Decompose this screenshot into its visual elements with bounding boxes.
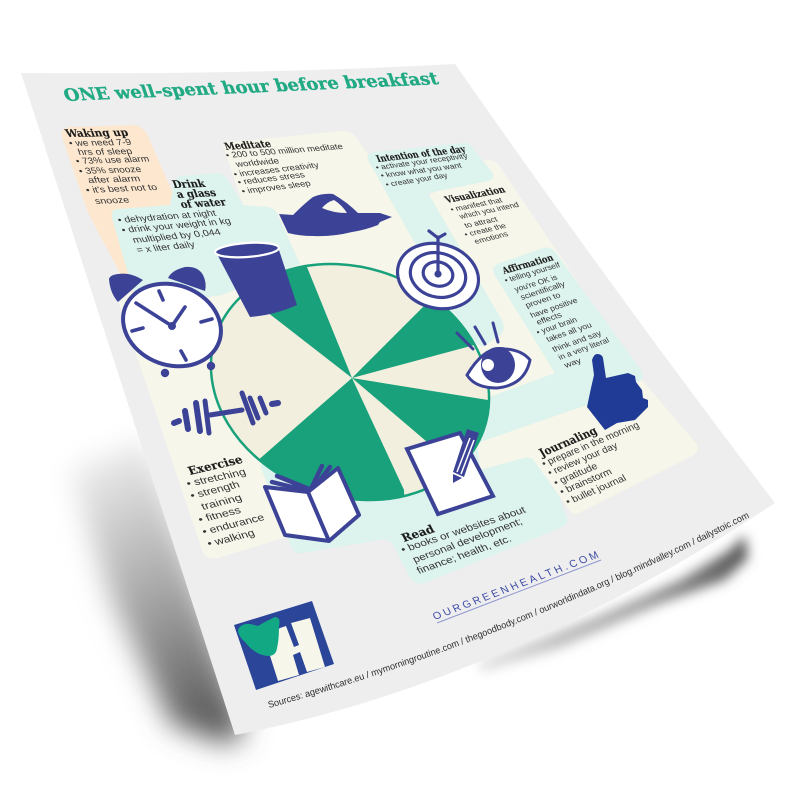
text block: exercise: • fitness [197, 505, 243, 526]
text block: meditate: worldwide [233, 156, 281, 169]
icon: eye [457, 323, 530, 388]
text block: waking up: Waking up [63, 126, 130, 140]
text block: exercise: training [200, 493, 244, 513]
icon: target [390, 231, 486, 318]
text block: journaling: • gratitude [552, 461, 600, 489]
wedge: top [270, 267, 352, 378]
icon: notebook and pencil [407, 429, 493, 514]
text block: exercise: • endurance [201, 512, 267, 538]
text block: waking up: • 35% snooze [77, 164, 143, 176]
text block: meditate: • 200 to 500 million meditate [224, 141, 345, 160]
text block: waking up: hrs of sleep [76, 146, 134, 157]
text block: waking up: • it's best not to [84, 182, 159, 195]
text block: drink a glass of water [116, 177, 232, 255]
text block: affirmation: scientifically [519, 280, 567, 302]
text block: drink a glass of water: • dehydration at night [116, 208, 218, 225]
wedge: bottom [260, 378, 404, 499]
text block: drink a glass of water: • drink your weight in kg [120, 216, 232, 235]
panel: visualization [427, 160, 610, 400]
panel: drink a glass of water [112, 173, 300, 308]
text block: affirmation: takes all you [545, 321, 593, 344]
text block: intention of the day: • know what you want [379, 161, 464, 180]
bottom page shadow [480, 535, 748, 672]
panel: affirmation and read band [260, 248, 643, 584]
text block: affirmation: you're OK is [513, 273, 559, 294]
text block: affirmation [500, 253, 611, 370]
text block: affirmation: effects [535, 310, 564, 327]
text block: intention of the day: Intention of the day [375, 144, 468, 165]
text block: journaling: Journaling [535, 424, 600, 460]
panel: main cream background [110, 131, 495, 559]
text block: journaling: • prepare in the morning [540, 420, 642, 470]
panel: journaling [477, 380, 698, 514]
text block: drink a glass of water: of water [178, 196, 228, 211]
text block: affirmation: • telling yourself [503, 260, 562, 285]
text block: exercise: Exercise [185, 452, 245, 478]
wheel chart [210, 262, 490, 502]
text block: affirmation: way [561, 356, 583, 370]
text block: visualization: emotions [472, 230, 510, 246]
text block: affirmation: think and say [551, 329, 603, 354]
text block: intention of the day [374, 144, 469, 189]
text block: intention of the day: • activate your receptivity [374, 152, 469, 172]
text block: read: finance; health, etc. [415, 534, 514, 577]
text block: visualization: Visualization [442, 185, 507, 206]
text block: waking up: snooze [93, 195, 131, 206]
left page shadow [70, 440, 245, 745]
website link: OURGREENHEALTH.COM [431, 549, 601, 623]
text block: waking up: • 73% use alarm [74, 154, 151, 166]
text block: affirmation: proven to [524, 290, 563, 310]
text block: exercise [185, 452, 267, 550]
text block: journaling: • review your day [546, 441, 620, 479]
text block: journaling: • bullet journal [564, 473, 628, 508]
text block: exercise: • stretching [185, 467, 248, 490]
text block: affirmation: in a very literal [556, 336, 611, 362]
text block: affirmation: Affirmation [500, 253, 555, 277]
text block: meditate: Meditate [223, 138, 273, 153]
text block: visualization: to attract [462, 215, 500, 230]
icon: meditating hand [279, 194, 392, 236]
logo [234, 601, 334, 690]
text block: meditate: • increases creativity [232, 160, 321, 179]
icon: dumbbell [174, 393, 278, 433]
text block: affirmation: • your brain [535, 315, 579, 337]
icon: alarm clock [109, 267, 233, 380]
text: Sources: agewithcare.eu / mymorningroutine.com / thegoodbody.com / ourworldindata.org / blog.mindvalley.com / dailystoic.com [268, 513, 750, 708]
text block: waking up [63, 126, 159, 206]
text block: drink a glass of water: a glass [174, 186, 218, 201]
text block: intention of the day: • create your day [384, 171, 449, 189]
wedge: lower right [352, 378, 488, 447]
panel: intention of the day [368, 143, 504, 347]
text block: waking up: • we need 7-9 [67, 137, 133, 148]
text block: drink a glass of water: Drink [170, 177, 208, 191]
icon: open book [265, 466, 359, 541]
text block: meditate: • improves sleep [240, 178, 313, 196]
text block: affirmation: have positive [529, 296, 580, 320]
text block: drink a glass of water: = x liter daily [135, 239, 197, 255]
text block: visualization: • create the [462, 221, 508, 239]
text block: visualization [442, 185, 521, 246]
text block: meditate [223, 138, 345, 196]
text block: read: personal development; [411, 517, 525, 566]
text block: exercise: • walking [206, 528, 257, 550]
text block: exercise: • strength [189, 480, 242, 502]
text block: read: Read [399, 522, 437, 545]
icon: thumbs up [587, 354, 648, 430]
text block: read: • books or websites about [399, 505, 528, 556]
sources line [269, 516, 752, 708]
text block: visualization: which you intend [456, 200, 521, 221]
icon: glass of water [215, 241, 297, 317]
text block: drink a glass of water: multiplied by 0,044 [131, 227, 222, 245]
text block: visualization: • manifest that [449, 196, 505, 214]
text block: journaling [535, 420, 642, 508]
page sheet [21, 64, 775, 735]
title: ONE well-spent hour before breakfast [61, 70, 441, 106]
text block: meditate: • reduces stress [236, 170, 306, 187]
text block: waking up: after alarm [86, 173, 142, 185]
text block: read [399, 505, 528, 577]
wedge: upper right [352, 306, 474, 378]
text block: journaling: • brainstorm [558, 467, 614, 498]
panel: waking up [62, 125, 174, 295]
